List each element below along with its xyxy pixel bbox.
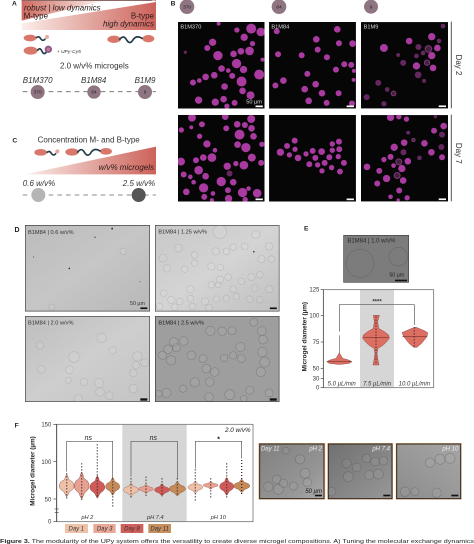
y axis: 100 xyxy=(41,460,52,466)
marker 9 xyxy=(138,85,152,99)
image: B1M9 day 2 xyxy=(361,22,448,108)
label: B-type: B-type xyxy=(131,11,155,20)
label: 7.5 µL/min: 7.5 µL/min xyxy=(363,382,392,388)
bracket: pH 7.4 ns xyxy=(131,435,177,478)
label: B1M84: B1M84 xyxy=(81,76,107,85)
significance bracket: **** xyxy=(372,300,382,306)
panel B: fluorescence microscopy xyxy=(171,0,463,202)
violins: pH 7.4 xyxy=(124,477,185,499)
icon: B-type molecule xyxy=(65,148,112,156)
label: UPy-Cy5: + UPy-Cy5 xyxy=(57,49,81,55)
top band xyxy=(22,0,156,2)
panel A: molecular dynamics xyxy=(12,0,156,99)
label: pH 10: pH 10 xyxy=(210,515,227,521)
panel C: concentration xyxy=(12,135,156,202)
image: B1M84 1.0 w/v% xyxy=(343,235,409,283)
marker 0.6 xyxy=(31,188,45,202)
panel letter A: A xyxy=(12,1,17,8)
y axis: 75 xyxy=(313,340,320,346)
bracket: pH 2 ns: ns xyxy=(85,435,93,442)
marker 370: 370 xyxy=(183,5,191,11)
image: 2.5 w/v% xyxy=(155,316,280,402)
label: B1M9: B1M9 xyxy=(135,76,156,85)
image: B1M9 day 2: B1M9 xyxy=(364,25,378,31)
image: 0.6 w/v%: B1M84 | 0.6 w/v% xyxy=(28,230,73,236)
violins: pH 10 xyxy=(188,460,250,501)
panel letter B: B xyxy=(171,1,176,8)
marker 9 xyxy=(364,0,378,14)
composition dashed line xyxy=(23,90,156,93)
panel E: flow rate xyxy=(301,226,434,392)
marker 84: 84 xyxy=(276,5,282,11)
marker 370: 370 xyxy=(34,90,42,95)
bracket: pH 7.4 ns: ns xyxy=(150,435,158,442)
icon: M-type molecule xyxy=(24,35,49,41)
image: pH 7.4: pH 7.4 xyxy=(371,447,391,453)
violin: 10.0 µL/min xyxy=(402,327,428,347)
label: 0.6 w/v%: 0.6 w/v% xyxy=(23,179,55,188)
y axis: 0 xyxy=(48,520,52,526)
image: B1M370 day 2: 50 µm xyxy=(246,100,262,106)
image: B1M370 day 7 xyxy=(178,115,264,202)
bracket: pH 10 significant: * xyxy=(217,436,220,443)
image: 1.25 w/v%: B1M84 | 1.25 w/v% xyxy=(158,230,207,236)
image: B1M370 day 2: B1M370 xyxy=(180,25,201,31)
panel letter C: C xyxy=(12,137,17,144)
wedge divider xyxy=(22,1,156,23)
y axis title: Microgel diameter (µm) xyxy=(301,302,308,371)
panel D: brightfield microscopy xyxy=(14,225,280,403)
image: pH 10: pH 10 xyxy=(441,447,459,453)
y axis xyxy=(41,423,59,526)
violin: 5.0 µL/min xyxy=(327,335,352,364)
violin: 7.5 µL/min xyxy=(363,315,389,365)
y axis xyxy=(309,288,323,392)
marker 2.5 xyxy=(132,188,146,202)
marker 370 xyxy=(31,85,45,99)
label: w/v% microgels: w/v% microgels xyxy=(99,163,154,172)
y axis: 0 xyxy=(316,386,320,392)
label: pH 2: pH 2 xyxy=(80,515,94,521)
concentration dashed line xyxy=(23,194,156,196)
legend: Day 3 xyxy=(93,524,116,533)
marker 84 xyxy=(87,85,101,99)
image: 2.0 w/v% xyxy=(25,316,150,402)
marker 9: 9 xyxy=(144,90,147,95)
legend: Day 8 xyxy=(121,524,143,533)
legend: Day 11: Day 11 xyxy=(150,527,169,533)
image: 1.25 w/v% xyxy=(155,225,280,312)
label: 5.0 µL/min: 5.0 µL/min xyxy=(328,382,356,388)
image: B1M84 day 7 xyxy=(269,115,356,202)
violins: pH 2 xyxy=(59,444,120,507)
label: M-type: M-type xyxy=(24,12,49,21)
y axis: 30 xyxy=(313,376,320,382)
day bracket line xyxy=(450,115,453,201)
image: 0.6 w/v% xyxy=(25,225,150,312)
grey band xyxy=(122,425,187,522)
y axis: 150 xyxy=(41,423,52,429)
label: Concentration M- and B-type: Concentration M- and B-type xyxy=(38,135,140,144)
label: 2.5 w/v%: 2.5 w/v% xyxy=(122,179,155,188)
image: B1M370 day 2 xyxy=(178,22,264,108)
wedge: M-type low dynamics xyxy=(22,0,107,21)
image: pH 2: 50 µm xyxy=(305,489,322,495)
icon: M-type molecule with UPy-Cy5 xyxy=(24,46,52,55)
label: 2.0 w/v% microgels: 2.0 w/v% microgels xyxy=(60,62,129,71)
image: B1M84 day 2: B1M84 xyxy=(271,25,289,31)
label: B1M370: B1M370 xyxy=(23,76,53,85)
wedge: B-type high dynamics xyxy=(22,2,156,30)
label: Day 7: Day 7 xyxy=(454,143,463,164)
significance bracket xyxy=(339,300,414,332)
panel F: pH stability xyxy=(15,423,253,533)
image: 2.0 w/v%: B1M84 | 2.0 w/v% xyxy=(28,321,73,327)
y axis: 50 xyxy=(313,367,320,373)
label: pH 7.4: pH 7.4 xyxy=(146,515,164,521)
image: pH 10 xyxy=(396,443,462,500)
image: B1M84 1.0 w/v%: 50 µm xyxy=(389,272,405,278)
label: high dynamics: high dynamics xyxy=(103,20,154,29)
legend: Day 1: Day 1 xyxy=(69,527,84,533)
image: B1M9 day 7 xyxy=(361,115,448,202)
label: 2.0 w/v%: 2.0 w/v% xyxy=(224,427,251,434)
panel: day 11 micrographs xyxy=(258,443,462,500)
icon: M-type molecule xyxy=(34,149,59,156)
plot frame xyxy=(323,290,434,388)
image: 0.6 w/v%: 50 µm xyxy=(130,301,145,307)
image: pH 2: Day 11 xyxy=(261,447,280,453)
image: B1M84 day 2 xyxy=(269,22,356,108)
label: robust low dynamics: robust | low dynamics xyxy=(24,4,101,13)
label: 10.0 µL/min: 10.0 µL/min xyxy=(399,382,431,388)
icon: B-type molecule xyxy=(107,35,154,43)
bracket: pH 2 ns xyxy=(67,435,113,478)
legend: Day 11 xyxy=(148,524,171,533)
wedge: concentration xyxy=(25,147,156,174)
image: 2.5 w/v%: B1M84 | 2.5 w/v% xyxy=(158,321,204,327)
y axis title: Microgel diameter (µm) xyxy=(29,436,36,506)
marker 9: 9 xyxy=(370,5,373,11)
y axis: 125 xyxy=(309,288,320,294)
marker 84: 84 xyxy=(91,90,97,95)
legend: Day 3: Day 3 xyxy=(97,527,113,533)
day bracket line xyxy=(450,22,453,108)
legend: Day 8: Day 8 xyxy=(124,527,140,533)
marker 84 xyxy=(272,0,286,14)
image: pH 2 xyxy=(258,443,326,500)
image: B1M84 1.0 w/v%: B1M84 | 1.0 w/v% xyxy=(347,238,396,244)
panel letter F: F xyxy=(15,423,19,430)
panel letter E: E xyxy=(304,226,309,233)
label: Day 2: Day 2 xyxy=(454,55,463,76)
panel letter D: D xyxy=(14,227,20,234)
image: pH 2: pH 2 xyxy=(308,447,323,453)
bracket: pH 10 significant xyxy=(195,436,242,468)
marker 370 xyxy=(180,0,194,14)
grey band xyxy=(360,290,394,387)
y axis: 100 xyxy=(309,313,320,319)
plot frame xyxy=(57,424,253,522)
legend: Day 1 xyxy=(65,524,88,533)
y axis: 50 xyxy=(45,497,52,503)
image: pH 7.4 xyxy=(327,443,393,500)
